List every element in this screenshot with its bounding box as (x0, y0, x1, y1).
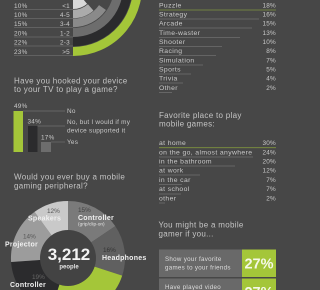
panel: game genres list: Other (159, 85, 178, 92)
panel: game genres list: Racing (159, 48, 182, 55)
heading: favorite place: Favorite place to play (159, 111, 242, 120)
panel: favorite place list: 12% (262, 168, 276, 174)
panel: favorite place list: at home (159, 140, 186, 147)
row: show favorite games: games to your friends (165, 264, 231, 272)
donut labels: 14% (23, 234, 36, 240)
bar labels: No, but I would if my (67, 119, 131, 126)
heading: TV hookup: Have you hooked your device (14, 76, 128, 86)
radial chart row labels: 10% (14, 3, 28, 10)
panel: game genres list: Time-waster (159, 30, 201, 37)
radial chart row labels: 3-4 (60, 21, 70, 28)
panel: game genres list: Simulation (159, 58, 195, 64)
panel: game genres list: 15% (262, 20, 276, 28)
radial chart arcs (73, 0, 137, 52)
bar labels: No (67, 108, 76, 115)
bar labels: Yes (67, 139, 78, 146)
panel: game genres list: 13% (262, 30, 276, 37)
donut labels: 16% (103, 247, 116, 254)
bar labels (14, 103, 131, 146)
bar labels: 34% (28, 118, 41, 126)
panel: favorite place list: 2% (266, 196, 276, 202)
panel: game genres list: Arcade (159, 20, 183, 28)
heading: favorite place: mobile games: (159, 120, 215, 128)
radial chart row labels: 22% (14, 40, 28, 46)
radial chart row labels: 10% (14, 12, 28, 19)
panel: peripheral donut chart (5, 172, 147, 290)
panel: game genres list: Strategy (159, 12, 188, 18)
bars (14, 111, 51, 152)
panel: favorite place list (159, 111, 276, 203)
radial chart row labels: 15% (14, 21, 28, 28)
panel: game genres list: 7% (266, 58, 276, 64)
panel: favorite place list: 7% (266, 186, 276, 193)
panel: favorite place list: 7% (266, 177, 276, 184)
row: show favorite games: Show your favorite (165, 256, 222, 263)
donut labels: Controller (78, 215, 114, 222)
radial chart row labels: 23% (14, 49, 28, 56)
panel: you might be a mobile gamer (158, 220, 276, 290)
panel: favorite place list: 20% (262, 158, 276, 166)
panel: favorite place list: 24% (262, 150, 276, 156)
donut labels: (grip/clip-on) (78, 222, 105, 228)
donut labels: Speakers (28, 216, 61, 222)
donut labels: Headphones (102, 255, 147, 262)
panel: favorite place list: on the go, almost anywhere (159, 150, 252, 156)
radial chart row labels: 2-3 (60, 40, 70, 46)
panel: game genres list: Shooter (159, 39, 186, 46)
radial chart row labels (14, 3, 73, 56)
radial chart row labels: 20% (14, 30, 28, 38)
radial chart row labels: <1 (62, 3, 70, 10)
radial chart row labels: >5 (62, 49, 70, 56)
donut centre (40, 230, 96, 286)
heading: peripheral: gaming peripheral? (14, 182, 88, 190)
radial chart row labels: 1-2 (60, 30, 70, 38)
bar labels: 49% (14, 103, 28, 110)
heading: peripheral: Would you ever buy a mobile (14, 172, 125, 182)
panel: favorite place list: at work (159, 168, 184, 174)
panel: game genres list: 2% (266, 85, 276, 92)
total count: people (59, 264, 79, 270)
panel: game genres list: 4% (266, 76, 276, 82)
heading: mobile gamer: gamer if you... (158, 230, 214, 238)
panel: game genres list (159, 2, 276, 92)
bar labels: device supported it (67, 128, 125, 134)
row: have played video (159, 278, 276, 290)
panel: favorite place list: 30% (262, 140, 276, 147)
donut segments (11, 201, 125, 290)
panel: TV hookup bar chart (14, 76, 131, 152)
panel: game genres list: Puzzle (159, 2, 182, 10)
donut labels: 15% (78, 207, 91, 214)
donut labels: 19% (32, 274, 45, 281)
bar labels: 17% (41, 134, 55, 142)
panel: favorite place list: in the bathroom (159, 158, 212, 166)
panel: game genres list: 16% (262, 12, 276, 18)
panel: game genres list: Sports (159, 66, 181, 74)
panel: game genres list: 5% (266, 66, 276, 74)
total count: 3,212 (48, 245, 90, 264)
donut labels: Projector (5, 242, 38, 248)
row: show favorite games (159, 250, 276, 277)
panel: game genres list: Trivia (159, 76, 178, 82)
panel: game genres list: 8% (266, 48, 276, 55)
radial chart row labels: 4-5 (60, 12, 70, 19)
panel: favorite place list: at school (159, 186, 190, 193)
panel: hours played radial chart (14, 0, 137, 56)
panel: game genres list: 10% (262, 39, 276, 46)
heading: mobile gamer: You might be a mobile (158, 220, 244, 230)
donut labels: 12% (47, 208, 60, 215)
panel: game genres list: 18% (262, 2, 276, 10)
heading: TV hookup: to your TV to play a game? (14, 85, 118, 94)
donut labels (5, 207, 147, 289)
panel: favorite place list: in the car (159, 177, 191, 184)
panel: favorite place list: other (159, 196, 177, 202)
row: show favorite games: 27% (244, 256, 274, 272)
donut labels: Controller (10, 282, 46, 289)
